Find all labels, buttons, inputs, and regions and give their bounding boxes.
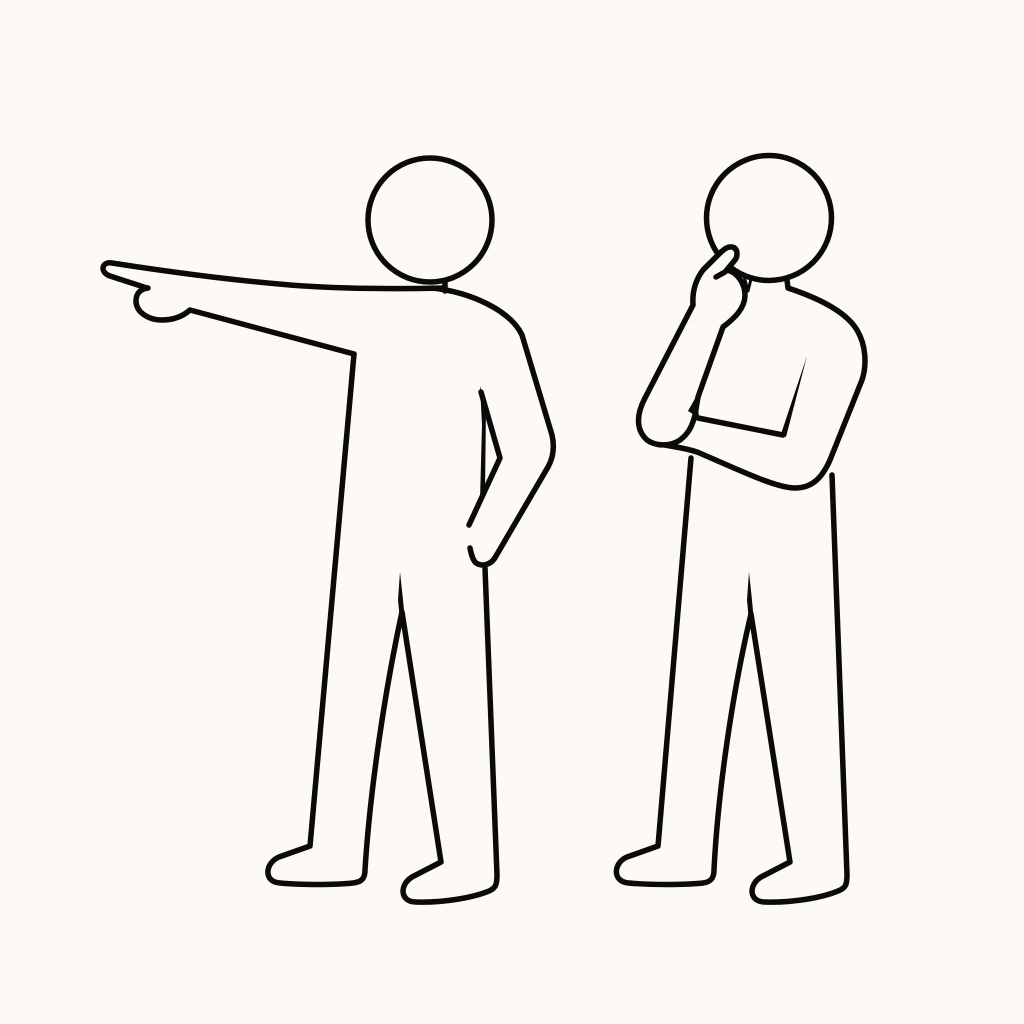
raised forearm and finger [638, 247, 745, 445]
upper arm inner line [698, 418, 783, 435]
hip wedge [480, 386, 486, 500]
torso and legs [616, 458, 847, 902]
tapered upper arm line [781, 356, 807, 437]
pointing hand: thumb knuckle and underarm [136, 288, 354, 354]
body and legs [268, 354, 497, 902]
inner leg wedge [398, 572, 405, 620]
hip gap triangle [469, 392, 500, 525]
neck [442, 282, 448, 291]
figure: thinking person [616, 156, 865, 902]
collar detail [744, 276, 751, 291]
elbow spur [688, 395, 699, 418]
head [706, 156, 832, 280]
figure: pointing person [103, 158, 553, 902]
shoulder and hand-on-hip arm [432, 288, 553, 565]
inner leg wedge [747, 572, 754, 622]
shoulder and folded arm [665, 280, 865, 488]
pointing arm: top edge and index finger [103, 263, 445, 289]
finger fill over head [700, 247, 737, 290]
head [368, 158, 492, 282]
